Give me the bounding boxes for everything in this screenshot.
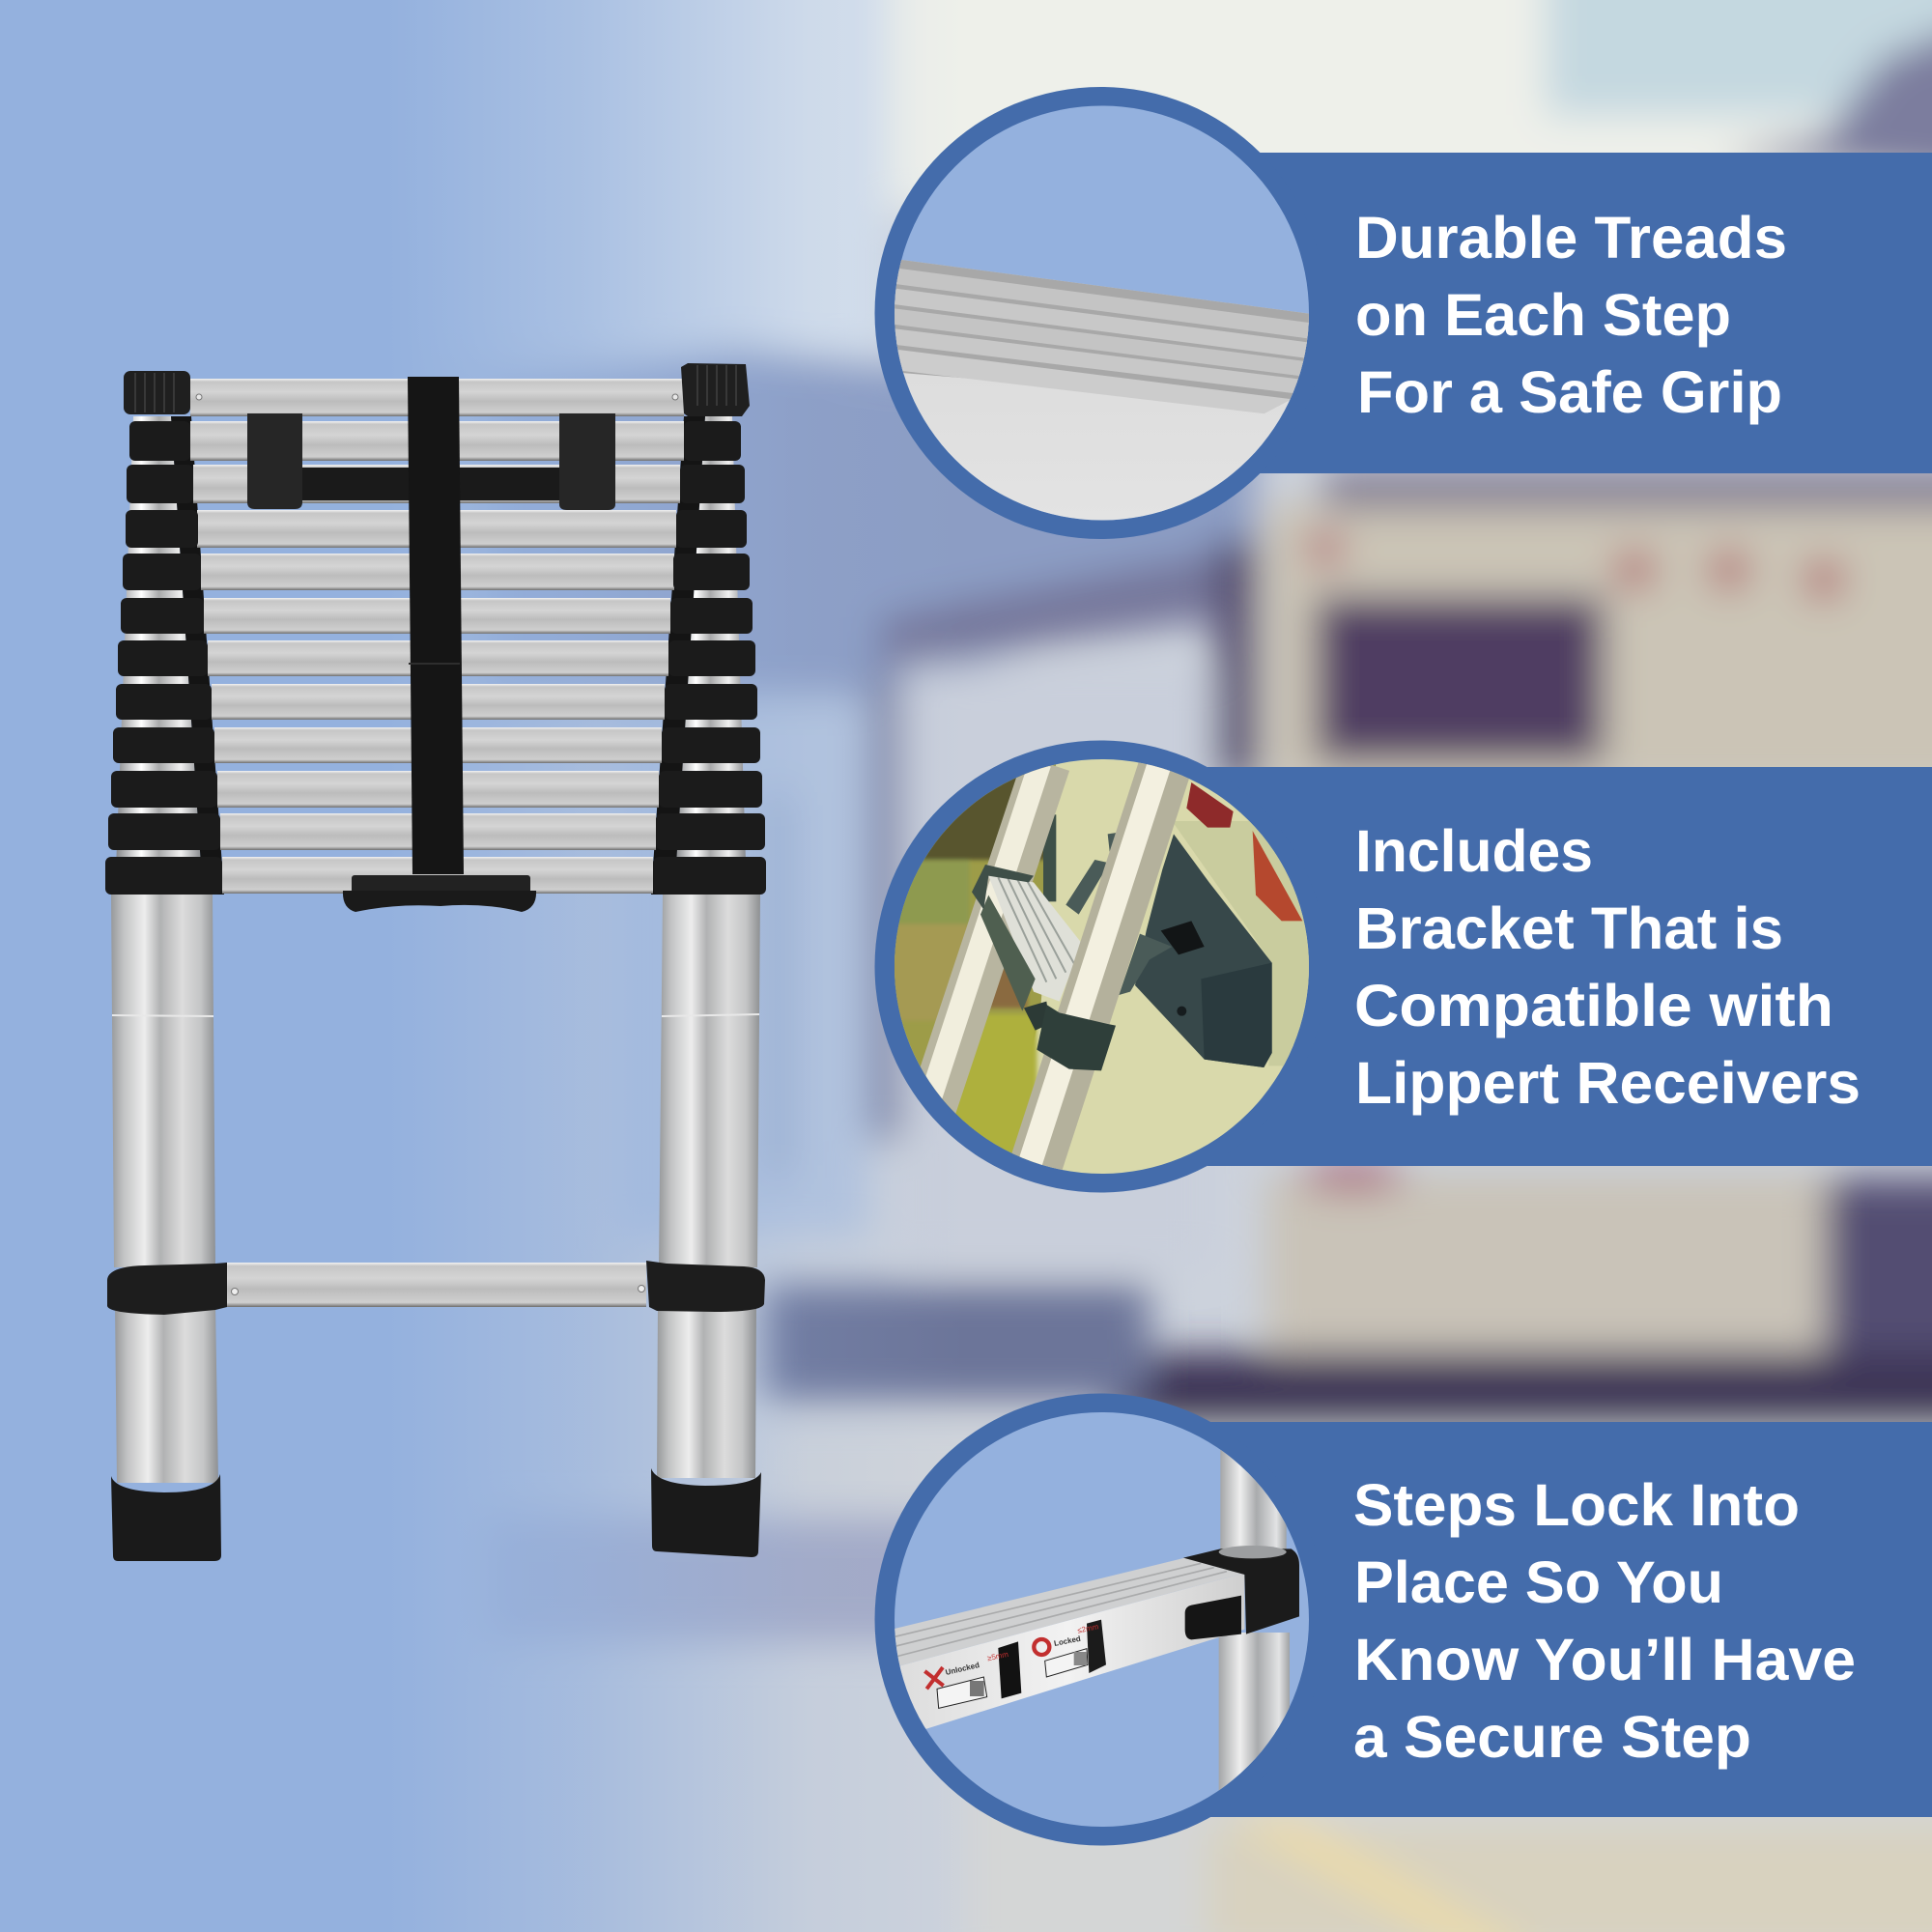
text: Place So You	[1354, 1549, 1723, 1615]
circle photo: lock mechanism: Locked	[1053, 1634, 1082, 1648]
circle ring	[875, 87, 1327, 539]
circle photo: lock mechanism: ≤2mm	[1077, 1622, 1099, 1635]
rung top and face	[892, 1558, 1244, 1668]
text	[1354, 818, 1861, 1116]
text: Steps Lock Into	[1353, 1472, 1800, 1538]
text: Know You’ll Have	[1354, 1627, 1856, 1692]
circle photo: ladder on bracket	[892, 756, 1311, 1176]
tread	[988, 876, 1082, 1002]
clips	[247, 413, 615, 510]
bottom rung and clamps	[107, 1261, 765, 1315]
banner	[1208, 1422, 1932, 1817]
feet	[111, 1468, 761, 1561]
panel: durable treads	[875, 87, 1932, 542]
text: Bracket That is	[1355, 895, 1783, 961]
banner	[1208, 153, 1932, 473]
rungs	[190, 379, 684, 894]
text: a Secure Step	[1353, 1704, 1751, 1770]
clamp	[1037, 1005, 1116, 1070]
text: Lippert Receivers	[1355, 1050, 1861, 1116]
upper tubes	[111, 895, 760, 1267]
text: Durable Treads	[1355, 205, 1787, 270]
text: Includes	[1355, 818, 1593, 884]
lower tubes	[115, 1304, 756, 1483]
top end caps	[124, 363, 750, 416]
panel: step locks	[875, 1393, 1932, 1845]
foliage	[892, 763, 1050, 1169]
text	[1355, 205, 1787, 425]
left clamps	[105, 421, 222, 895]
bracket	[1135, 834, 1272, 1067]
circle photo: lock mechanism	[892, 1410, 1311, 1829]
vertical tube	[1220, 1449, 1287, 1549]
lights	[1186, 782, 1234, 828]
clamp	[1183, 1548, 1299, 1634]
lock handle	[1185, 1596, 1241, 1639]
sticker graphics	[998, 1641, 1021, 1698]
black inner clamp columns	[171, 416, 705, 895]
ladder product photo	[105, 363, 766, 1561]
text: For a Safe Grip	[1357, 359, 1782, 425]
silver tube sections between upper clamps	[115, 416, 747, 895]
circle photo: lock mechanism: Unlocked	[945, 1661, 980, 1677]
strap handle	[343, 875, 536, 912]
near tube	[1027, 760, 1167, 1172]
T-bar between clips	[302, 468, 559, 500]
circle ring	[875, 740, 1327, 1192]
circle photo: lock mechanism: ≥5mm	[986, 1650, 1009, 1662]
rung rivets	[196, 394, 678, 400]
text	[1353, 1472, 1856, 1770]
panel: bracket	[875, 740, 1932, 1192]
strap	[408, 377, 464, 874]
circle photo: tread close-up	[895, 106, 1309, 520]
circle ring	[875, 1393, 1327, 1845]
far tube	[927, 763, 1046, 1108]
text: Compatible with	[1354, 973, 1833, 1038]
banner	[1208, 767, 1932, 1166]
right clamps	[653, 421, 766, 895]
text: on Each Step	[1355, 282, 1731, 348]
